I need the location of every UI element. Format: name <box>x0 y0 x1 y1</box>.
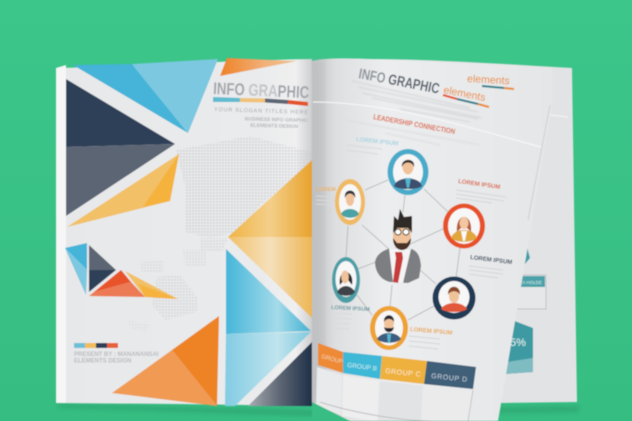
group D <box>424 361 476 389</box>
label: bottom person: LOREM IPSUM <box>410 327 453 337</box>
cover title: INFO GRAPHIC <box>213 79 310 102</box>
big orange triangle <box>112 316 219 406</box>
person: teal circle <box>332 257 360 303</box>
person: red circle <box>443 204 485 248</box>
group B: GROUP B <box>347 362 377 373</box>
bottom green wedge <box>312 402 350 421</box>
book spread <box>56 58 580 421</box>
section heading: LEADERSHIP CONNECTION <box>373 112 456 136</box>
label: teal person <box>331 305 370 329</box>
section subtitle <box>345 120 480 145</box>
group A: GROUP A <box>320 354 348 367</box>
central leader figure <box>375 209 421 283</box>
elements label upper: elements <box>467 73 510 87</box>
back page: teal data box: TA HOLDE <box>520 280 542 285</box>
navy and grey triangle <box>66 79 175 216</box>
top orange triangle <box>220 58 297 76</box>
dark corner triangle <box>248 342 312 406</box>
person: gold left circle <box>335 179 365 225</box>
group table <box>316 343 476 421</box>
label: bottom person <box>409 327 453 349</box>
back page: teal data box <box>513 275 546 309</box>
book shadow <box>58 404 580 416</box>
back right page <box>312 59 577 404</box>
slogan: YOUR SLOGAN TITLES HERE <box>214 107 308 116</box>
blue triangle <box>225 249 311 406</box>
presenter credit: PRESENT BY : MANANANSAI <box>74 352 159 358</box>
label: navy person: LOREM IPSUM <box>470 255 513 266</box>
cover subtitle: ELEMENTS DESIGN <box>250 123 298 130</box>
group B <box>343 352 382 379</box>
gold triangle <box>67 154 179 227</box>
top blue triangles <box>73 59 218 133</box>
table lines <box>320 402 430 421</box>
label: blue person: LOREM IPSUM <box>356 137 399 147</box>
leaf fold line <box>313 102 541 147</box>
elements label lower: elements <box>442 84 487 104</box>
label: red person: LOREM IPSUM <box>458 179 500 191</box>
dotted world map <box>128 136 312 332</box>
right faint edges <box>528 105 550 220</box>
cover colour bar <box>74 343 118 348</box>
label: navy person <box>469 255 513 278</box>
person: gold bottom circle <box>370 306 408 350</box>
presenter credit: ELEMENTS DESIGN <box>74 358 131 364</box>
fold shadow <box>312 60 326 408</box>
page stack edge <box>56 65 66 403</box>
back page: teal percent badge: 5% <box>510 337 526 349</box>
label: teal person: LOREM IPSUM <box>331 305 370 313</box>
left page <box>56 58 314 406</box>
back page: teal triangle <box>520 240 530 270</box>
person: navy circle <box>432 276 476 320</box>
label: gold person: LOREM <box>316 187 336 193</box>
right gold triangle <box>228 160 312 318</box>
cover title colour bar <box>213 97 308 106</box>
label: gold person <box>316 187 336 205</box>
connection lines <box>346 180 460 320</box>
group A <box>318 343 348 373</box>
label: blue person <box>346 137 399 154</box>
cover subtitle <box>245 116 308 130</box>
small triangle cluster <box>65 243 178 299</box>
group C <box>380 356 427 384</box>
front right leaf <box>312 58 568 421</box>
leaf title: INFO GRAPHIC <box>357 66 441 98</box>
back page: teal percent badge <box>505 320 533 374</box>
label: red person <box>456 179 506 203</box>
table cells <box>316 367 472 421</box>
group D: GROUP D <box>431 373 468 384</box>
presenter credit <box>74 352 159 364</box>
intro paragraph <box>352 81 482 122</box>
person: blue circle <box>388 149 428 195</box>
cover subtitle: BUSINESS INFO GRAPHIC <box>245 116 308 124</box>
group C: GROUP C <box>385 368 421 379</box>
